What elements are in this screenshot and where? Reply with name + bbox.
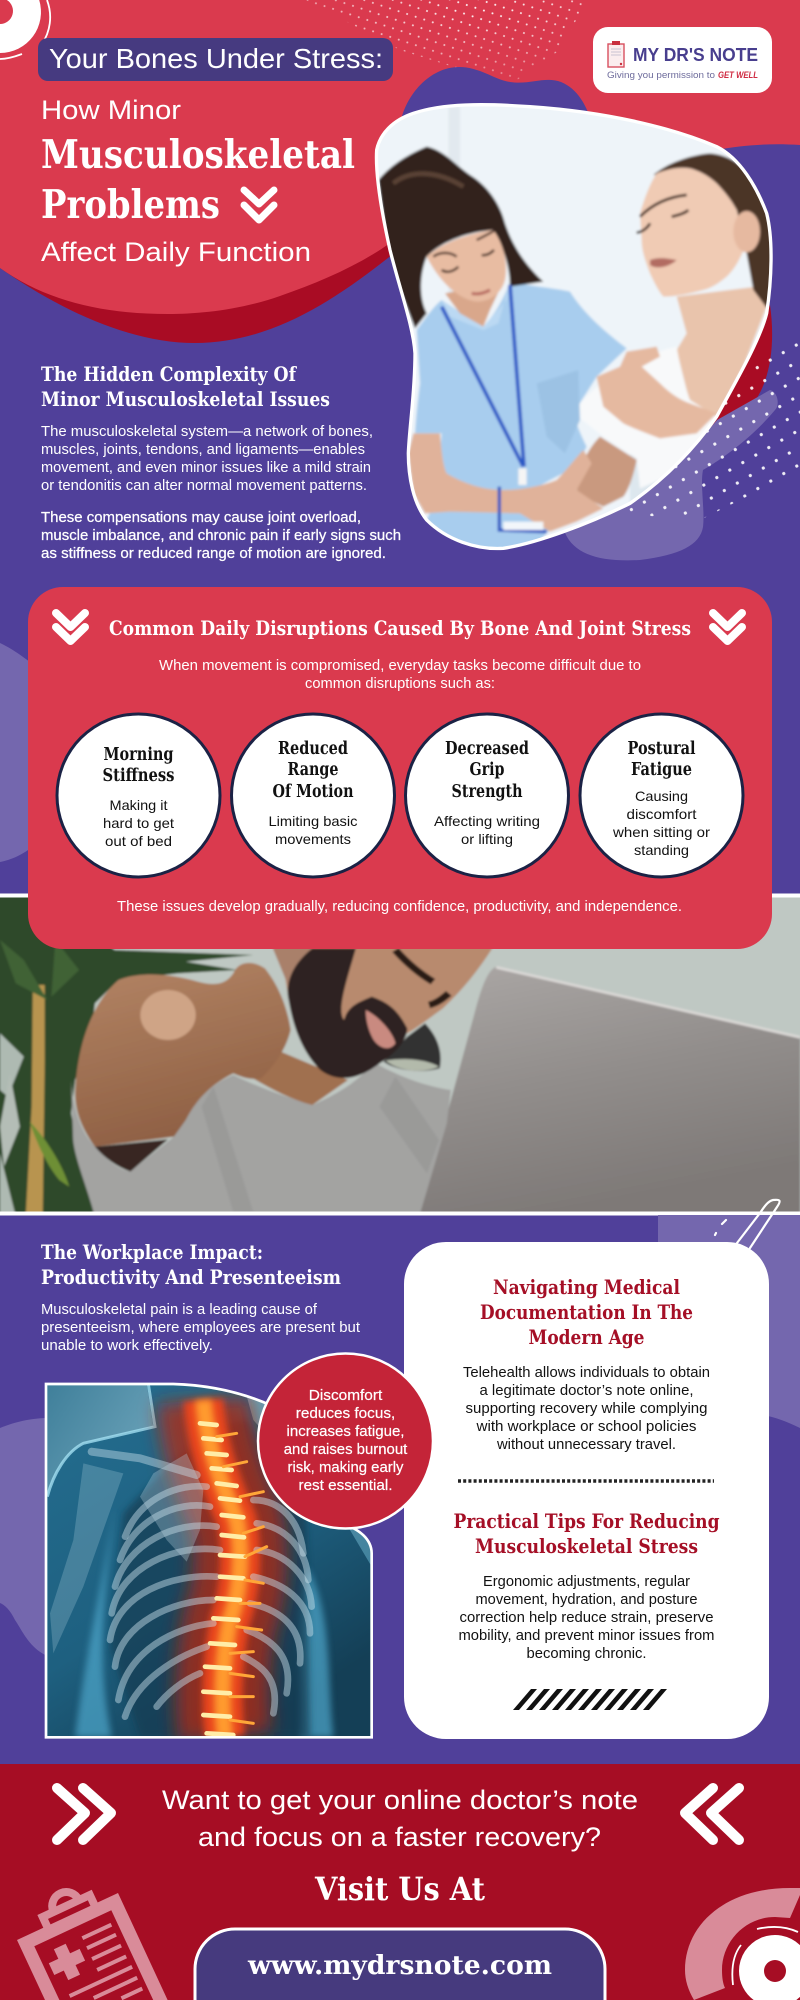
callout: discomfort circle: increases fatigue,	[286, 1424, 404, 1440]
patient chest and neck	[677, 287, 767, 417]
title block	[38, 38, 393, 267]
title pill	[38, 38, 393, 81]
paragraph two: These compensations may cause joint overload,	[41, 510, 361, 526]
torso shading	[110, 1420, 310, 1737]
hero red background	[0, 0, 800, 314]
logo badge: GET WELL	[718, 70, 758, 81]
beard	[288, 948, 407, 1078]
section: workplace impact	[41, 1241, 360, 1354]
body: ergonomic tips	[458, 1574, 714, 1662]
logo badge	[593, 27, 772, 93]
heading: The Hidden Complexity Of	[41, 363, 297, 386]
title line: Musculoskeletal: Musculoskeletal	[41, 132, 355, 178]
paragraph: Musculoskeletal pain is a leading cause of	[41, 1302, 318, 1318]
body: ergonomic tips: movement, hydration, and posture	[476, 1592, 698, 1608]
dark red blob right of photo	[690, 305, 772, 438]
light purple blob below photo	[565, 390, 778, 560]
heading	[41, 363, 330, 411]
nurse hand on shoulder	[597, 347, 717, 438]
nurse hair	[378, 147, 543, 328]
logo badge: MY DR'S NOTE	[633, 45, 758, 65]
body: telehealth: supporting recovery while complying	[466, 1401, 708, 1417]
photo white outline	[376, 105, 771, 549]
nurse ID card	[499, 487, 547, 532]
bottom-left light purple blob, section three	[0, 1418, 50, 1657]
panel heading: Common Daily Disruptions Caused By Bone And Joint Stress	[109, 616, 691, 640]
paragraph two	[41, 510, 401, 562]
body: ergonomic tips: becoming chronic.	[526, 1646, 646, 1662]
circle: morning stiffness: Making it	[110, 797, 168, 813]
side gaps between arms and torso	[72, 1538, 336, 1736]
callout: discomfort circle: Discomfort	[309, 1388, 382, 1404]
armpit	[95, 1139, 168, 1172]
circle: decreased grip strength: Strength	[452, 782, 523, 802]
callout: discomfort circle: risk, making early	[288, 1460, 404, 1476]
heading: Productivity And Presenteeism	[41, 1266, 341, 1289]
body: telehealth: without unnecessary travel.	[496, 1437, 676, 1453]
plant	[0, 894, 253, 1217]
circle: reduced range of motion: Range	[288, 760, 338, 780]
circle: decreased grip strength: Affecting writing	[434, 813, 540, 829]
circle: postural fatigue	[580, 714, 743, 877]
heading: The Workplace Impact:	[41, 1241, 263, 1264]
icon: logo clipboard	[608, 41, 624, 67]
collar bone	[92, 1452, 197, 1475]
heading: practical tips	[454, 1510, 720, 1558]
paragraph two: as stiffness or reduced range of motion are ignored.	[41, 546, 386, 562]
decorative black stripes	[513, 1689, 667, 1710]
elbow highlight	[140, 990, 196, 1040]
nurse forearm and hand	[408, 433, 603, 532]
icon: right chevrons	[713, 613, 742, 641]
top halftone dots	[306, 0, 587, 85]
shoulder blade	[140, 1453, 203, 1562]
purple blob behind photo	[400, 67, 596, 170]
title line: How Minor: How Minor	[41, 95, 181, 125]
circle: morning stiffness	[57, 714, 220, 877]
heading: navigating medical documentation: Documentation In The	[480, 1301, 693, 1324]
paragraph one: The musculoskeletal system—a network of bones,	[41, 424, 373, 440]
panel intro: common disruptions such as:	[305, 676, 495, 692]
patient face	[640, 168, 745, 297]
halftone dots right of photo	[600, 330, 800, 520]
body glow outline	[47, 1384, 155, 1497]
heading: navigating medical documentation: Navigating Medical	[493, 1276, 680, 1299]
heading: navigating medical documentation: Modern Age	[528, 1326, 644, 1349]
body: telehealth: with workplace or school policies	[475, 1419, 696, 1435]
url button: www.mydrsnote.com	[247, 1951, 552, 1981]
photo white rules	[0, 896, 800, 1214]
arm and hand	[75, 963, 291, 1147]
body: telehealth	[463, 1365, 710, 1453]
heading: practical tips: Practical Tips For Reducing	[454, 1510, 720, 1533]
laptop	[419, 967, 800, 1217]
heading: practical tips: Musculoskeletal Stress	[475, 1535, 698, 1558]
heading: Minor Musculoskeletal Issues	[41, 388, 330, 411]
heading: navigating medical documentation	[480, 1276, 693, 1349]
circle: reduced range of motion: Limiting basic	[268, 813, 358, 829]
brows and eye	[395, 950, 449, 1005]
patient upper arm	[577, 437, 637, 507]
circle: decreased grip strength: Decreased	[445, 739, 529, 759]
callout: discomfort circle	[258, 1354, 433, 1528]
desk lamp	[384, 1023, 441, 1071]
icon: left-pointing chevrons	[685, 1788, 739, 1840]
image white frame	[46, 1384, 372, 1737]
circle: decreased grip strength	[406, 714, 568, 877]
paragraph two: muscle imbalance, and chronic pain if early signs such	[41, 528, 401, 544]
body silhouette	[47, 1384, 372, 1737]
circle: reduced range of motion	[232, 714, 394, 877]
body: ergonomic tips: correction help reduce strain, preserve	[460, 1610, 714, 1626]
circle: morning stiffness: Stiffness	[102, 766, 175, 786]
body: ergonomic tips: Ergonomic adjustments, regular	[483, 1574, 690, 1590]
callout: discomfort circle: rest essential.	[298, 1478, 392, 1494]
title line: Affect Daily Function: Affect Daily Function	[41, 237, 311, 267]
call to action text: Want to get your online doctor’s note	[162, 1785, 638, 1815]
shirt	[71, 1063, 451, 1217]
icon: right-pointing chevrons	[57, 1788, 111, 1840]
footer: call to action band	[0, 1764, 800, 2000]
paragraph	[41, 1302, 360, 1354]
nurse scrubs	[415, 282, 627, 550]
url button	[195, 1929, 605, 2000]
icon: left chevrons	[56, 613, 85, 641]
top-right light purple blob, section three	[658, 1215, 800, 1428]
circle: postural fatigue: standing	[634, 842, 689, 858]
patient ear	[733, 211, 760, 252]
body: telehealth: Telehealth allows individuals to obtain	[463, 1365, 710, 1381]
patient white shirt	[580, 349, 710, 488]
lips	[366, 1010, 395, 1048]
paragraph one: or tendonitis can alter normal movement patterns.	[41, 478, 367, 494]
patient hair	[653, 153, 774, 310]
callout: discomfort circle: reduces focus,	[296, 1406, 395, 1422]
face	[285, 949, 493, 1034]
circle: postural fatigue: discomfort	[626, 806, 697, 822]
spine red glow	[203, 1400, 240, 1737]
body: ergonomic tips: mobility, and prevent minor issues from	[458, 1628, 714, 1644]
circle: decreased grip strength: Grip	[470, 760, 504, 780]
panel closing line: These issues develop gradually, reducing confidence, productivity, and independence.	[117, 899, 682, 915]
circle: reduced range of motion: movements	[275, 831, 351, 847]
icon: double chevron down	[244, 190, 274, 220]
heading	[41, 1241, 341, 1289]
circle: postural fatigue: Causing	[635, 788, 688, 804]
circle: postural fatigue: Postural	[628, 739, 696, 759]
visit us heading: Visit Us At	[314, 1870, 485, 1908]
vertebrae	[200, 1423, 245, 1735]
paragraph: unable to work effectively.	[41, 1338, 213, 1354]
nurse lanyard	[442, 285, 524, 467]
photo: nurse examining patient's shoulder	[370, 100, 780, 560]
panel intro	[159, 658, 641, 692]
call to action text: and focus on a faster recovery?	[198, 1822, 601, 1852]
section: hidden complexity	[41, 363, 401, 562]
neck	[253, 1050, 348, 1105]
circle: morning stiffness: Morning	[104, 745, 174, 765]
body: telehealth: a legitimate doctor’s note online,	[480, 1383, 694, 1399]
circle: postural fatigue: Fatigue	[631, 760, 692, 780]
icon: clipboard	[17, 1879, 168, 2000]
paragraph one	[41, 424, 373, 494]
paragraph one: movement, and even minor issues like a mild strain	[41, 460, 371, 476]
circle: morning stiffness: hard to get	[103, 815, 174, 831]
title pill: Your Bones Under Stress:	[49, 43, 383, 74]
paragraph: presenteeism, where employees are present but	[41, 1320, 360, 1336]
rib cage	[110, 1486, 312, 1717]
callout: discomfort circle: and raises burnout	[284, 1442, 407, 1458]
paragraph one: muscles, joints, tendons, and ligaments—enables	[41, 442, 365, 458]
arm bone	[50, 1463, 123, 1653]
logo badge: Giving you permission to	[607, 70, 715, 81]
hero dark red wave	[0, 150, 420, 343]
panel intro: When movement is compromised, everyday tasks become difficult due to	[159, 658, 641, 674]
circle: reduced range of motion: Reduced	[278, 739, 348, 759]
image: glowing spine x-ray	[46, 1384, 372, 1737]
circle: morning stiffness: out of bed	[105, 833, 172, 849]
circle: postural fatigue: when sitting or	[612, 824, 710, 840]
panel: common daily disruptions	[28, 587, 772, 949]
top-left target decoration	[0, 0, 50, 59]
photo: man with neck pain	[0, 894, 800, 1217]
icon: white scribble	[715, 1200, 780, 1248]
circle: reduced range of motion: Of Motion	[272, 782, 354, 802]
nurse face	[427, 230, 506, 302]
icon: target decoration	[685, 1888, 800, 2000]
circle: decreased grip strength: or lifting	[461, 831, 513, 847]
left light purple blob	[0, 643, 40, 862]
panel: white documentation card	[404, 1242, 769, 1739]
call to action text	[162, 1785, 638, 1852]
title line: Problems: Problems	[41, 182, 220, 228]
nurse neck	[444, 290, 498, 328]
